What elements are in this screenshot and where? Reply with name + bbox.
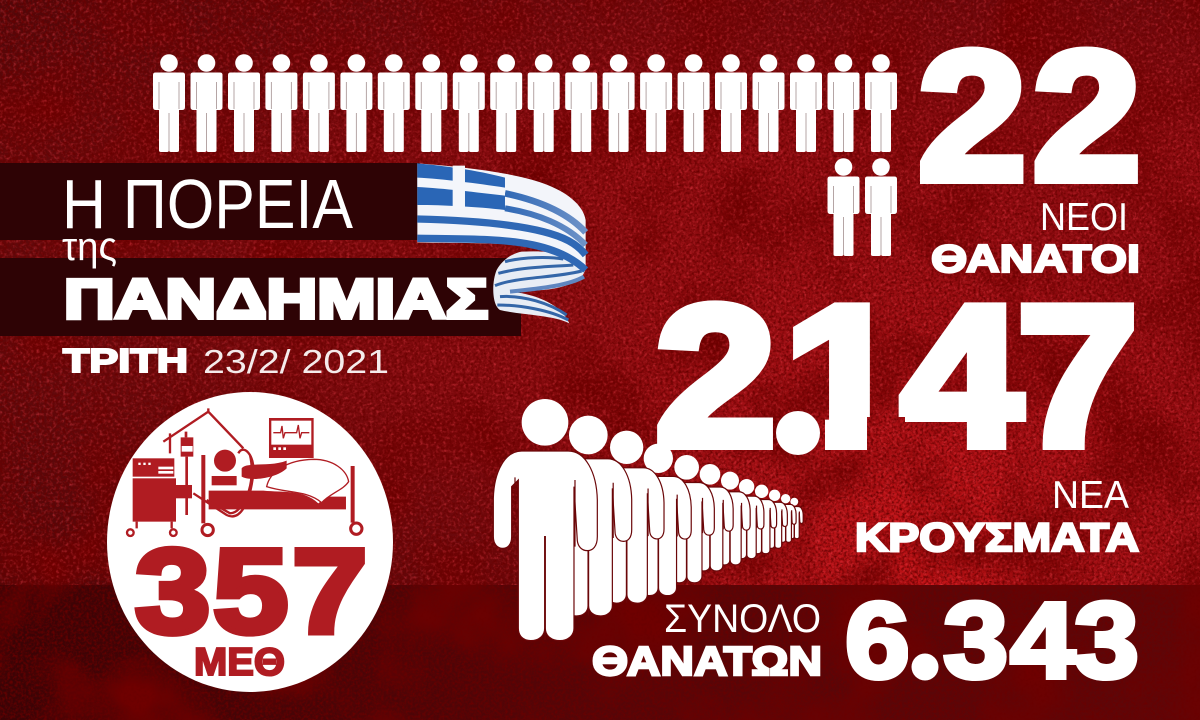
icon: ICU bed [127,408,362,536]
label: deaths: ΘΑΝΑΤΟΙ [931,238,1140,281]
number: new cases: 2.147 [655,265,1138,488]
label: new: ΝΕΑ [1052,474,1129,517]
date: day: ΤΡΙΤΗ [63,342,188,379]
label: ICU: ΜΕΘ [194,641,285,684]
number: total deaths: 6.343 [845,579,1139,701]
label: new: ΝΕΟΙ [1040,196,1128,239]
icon row: 20 people [153,54,897,152]
title line 3: ΠΑΝΔΗΜΙΑΣ [64,267,488,330]
panel: ICU circle [107,392,393,692]
icon row: 2 more people [828,158,897,256]
title line 2: της [62,225,117,269]
number: new cases [657,300,1134,455]
number: ICU patients: 357 [135,525,367,659]
title line 1: Η ΠΟΡΕΙΑ [62,165,353,243]
label: total: ΣΥΝΟΛΟ [664,597,821,641]
label: cases: ΚΡΟΥΣΜΑΤΑ [855,516,1139,560]
icon: Greek flag ribbon [417,163,586,323]
number: new deaths: 22 [918,14,1141,219]
number: total deaths [846,600,1138,681]
icon: line of people [493,399,803,641]
panel: title bands [0,163,521,336]
label: of deaths: ΘΑΝΑΤΩΝ [592,638,822,684]
date: numbers: 23/2/ 2021 [203,343,389,380]
